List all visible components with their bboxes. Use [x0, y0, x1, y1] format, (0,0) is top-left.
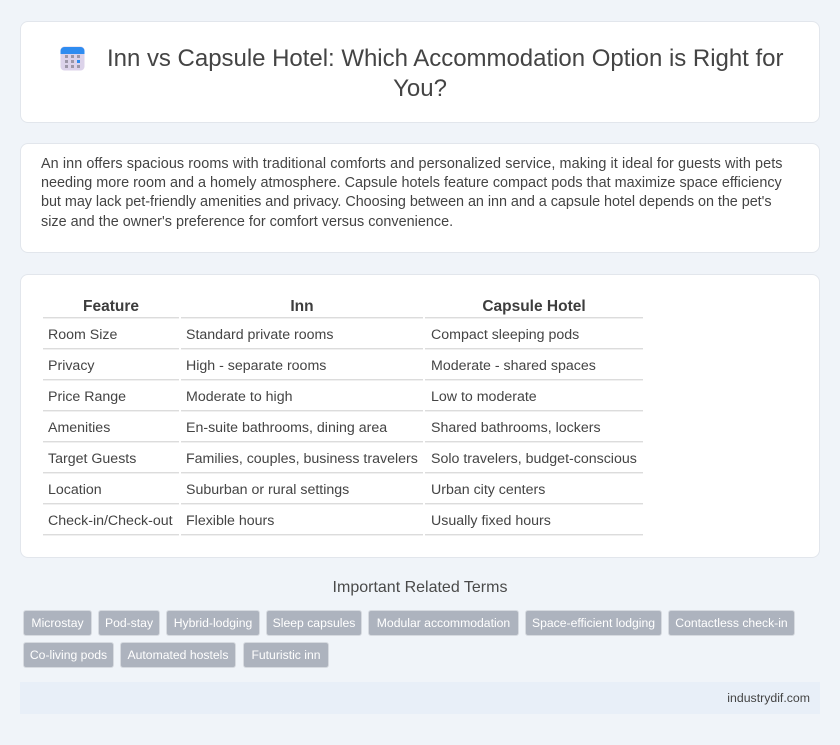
row: check-in: Flexible hours: [186, 513, 274, 529]
row: check-in: [48, 513, 551, 529]
row: amenities: Amenities: [48, 420, 110, 436]
panel: header: [20, 21, 820, 123]
row: location: Urban city centers: [431, 482, 545, 498]
tag: Hybrid-lodging: [174, 616, 252, 630]
text block: intro: needing more room and a homely atmosphere. Capsule hotels feature compact pods that maximize space efficiency: [41, 175, 782, 191]
table: [43, 298, 643, 536]
heading: related terms: Important Related Terms: [333, 579, 507, 596]
text block: intro: size and the owner's preference for comfort versus convenience.: [41, 214, 453, 230]
row: check-in: Usually fixed hours: [431, 513, 551, 529]
table header: Capsule Hotel: [482, 298, 586, 315]
row: price range: Price Range: [48, 389, 126, 405]
row: target guests: [48, 451, 637, 467]
footer credit: industrydif.com: [727, 691, 810, 705]
tag: [120, 642, 236, 668]
icon: calendar: [60, 46, 84, 70]
text block: intro: An inn offers spacious rooms with traditional comforts and personalized service, making it ideal for guests with pets: [41, 156, 783, 172]
table header: [83, 298, 586, 315]
row: target guests: Solo travelers, budget-conscious: [431, 451, 637, 467]
row: privacy: Moderate - shared spaces: [431, 358, 596, 374]
tag: Pod-stay: [105, 616, 153, 630]
tag: Microstay: [31, 616, 84, 630]
tag: Co-living pods: [30, 648, 107, 662]
row: price range: [48, 389, 537, 405]
title: [107, 45, 784, 102]
row: room size: Compact sleeping pods: [431, 327, 579, 343]
tag: Automated hostels: [128, 648, 228, 662]
table header: Inn: [290, 298, 314, 315]
tag: Sleep capsules: [273, 616, 355, 630]
tag: [166, 610, 260, 636]
row: room size: Standard private rooms: [186, 327, 333, 343]
tag: [368, 610, 519, 636]
tag: [668, 610, 795, 636]
row: check-in: Check-in/Check-out: [48, 513, 173, 529]
row: location: [48, 482, 545, 498]
title: You?: [393, 75, 447, 102]
tag: [98, 610, 160, 636]
panel: intro: [20, 143, 820, 253]
row: price range: Moderate to high: [186, 389, 292, 405]
table header: Feature: [83, 298, 139, 315]
row: amenities: En-suite bathrooms, dining area: [186, 420, 387, 436]
row: target guests: Target Guests: [48, 451, 136, 467]
row: privacy: [48, 358, 596, 374]
title: Inn vs Capsule Hotel: Which Accommodation Option is Right for: [107, 45, 783, 72]
row: target guests: Families, couples, business travelers: [186, 451, 418, 467]
text block: intro: but may lack pet-friendly amenities and privacy. Choosing between an inn and a capsule hotel depends on the pet's: [41, 194, 772, 210]
row: privacy: High - separate rooms: [186, 358, 326, 374]
row: room size: Room Size: [48, 327, 117, 343]
tag: [266, 610, 362, 636]
tag: [243, 642, 329, 668]
row: location: Suburban or rural settings: [186, 482, 349, 498]
panel: table: [20, 274, 820, 558]
row: privacy: Privacy: [48, 358, 95, 374]
row: price range: Low to moderate: [431, 389, 537, 405]
tag: Futuristic inn: [251, 648, 321, 662]
row: amenities: [48, 420, 601, 436]
tag: Contactless check-in: [675, 616, 788, 630]
tag: [23, 610, 92, 636]
footer: [20, 682, 820, 714]
tag: Space-efficient lodging: [532, 616, 655, 630]
row: amenities: Shared bathrooms, lockers: [431, 420, 601, 436]
row: room size: [48, 327, 579, 343]
text block: intro: [41, 156, 783, 230]
tag: Modular accommodation: [377, 616, 510, 630]
tags: [23, 610, 795, 668]
row: location: Location: [48, 482, 102, 498]
tag: [23, 642, 114, 668]
tag: [525, 610, 662, 636]
